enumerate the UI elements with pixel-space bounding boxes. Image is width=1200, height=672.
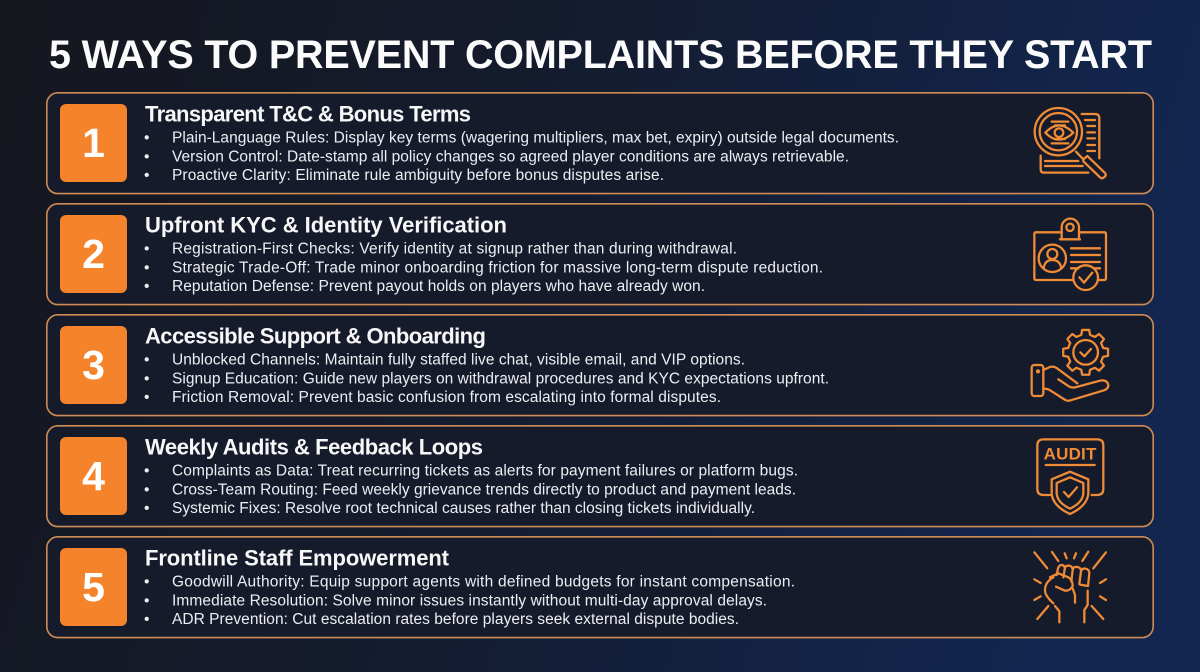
bullet list 3: •	[144, 352, 149, 368]
bullet list 1: Version Control: Date-stamp all policy changes so agreed player conditions are always retrievable.	[172, 148, 849, 166]
bullet list 5: Goodwill Authority: Equip support agents with defined budgets for instant compensation.	[172, 574, 795, 590]
panel: upfront KYC	[47, 204, 1153, 305]
heading 1: Transparent T&C & Bonus Terms	[145, 102, 471, 126]
number badge 5	[60, 548, 127, 626]
number badge 3: 3	[82, 342, 105, 388]
heading 3: Accessible Support & Onboarding	[145, 324, 486, 348]
bullet list 5: •	[144, 574, 149, 590]
bullet list 3: Friction Removal: Prevent basic confusion from escalating into formal disputes.	[172, 389, 721, 406]
bullet list 2	[144, 240, 823, 295]
bullet list 4: •	[144, 500, 149, 517]
bullet list 4: •	[144, 482, 149, 498]
bullet list 5: •	[144, 611, 149, 628]
bullet list 5: Immediate Resolution: Solve minor issues instantly without multi-day approval delays.	[172, 592, 767, 610]
bullet list 1	[144, 130, 899, 184]
bullet list 2: Strategic Trade-Off: Trade minor onboarding friction for massive long-term dispute reduction.	[172, 260, 823, 276]
number badge 1	[60, 104, 127, 182]
bullet list 1: •	[144, 167, 149, 184]
heading 4: Weekly Audits & Feedback Loops	[145, 434, 483, 460]
number badge 1: 1	[82, 120, 105, 166]
bullet list 3: Unblocked Channels: Maintain fully staffed live chat, visible email, and VIP options.	[172, 352, 745, 368]
bullet list 5: ADR Prevention: Cut escalation rates before players seek external dispute bodies.	[172, 611, 739, 628]
bullet list 2: •	[144, 240, 149, 258]
bullet list 1: Plain-Language Rules: Display key terms (wagering multipliers, max bet, expiry) outside legal documents.	[172, 130, 899, 146]
bullet list 3: •	[144, 389, 149, 406]
number badge 3	[60, 326, 127, 404]
number badge 2: 2	[82, 231, 105, 277]
bullet list 3	[144, 352, 829, 406]
bullet list 4: Systemic Fixes: Resolve root technical causes rather than closing tickets individually.	[172, 500, 755, 517]
bullet list 1: •	[144, 130, 149, 146]
bullet list 5: •	[144, 592, 149, 610]
number badge 2	[60, 215, 127, 293]
bullet list 1: •	[144, 148, 149, 166]
panel: transparent terms	[47, 93, 1153, 194]
icon: audit shield	[1037, 439, 1103, 514]
bullet list 5	[144, 574, 795, 628]
bullet list 4	[144, 462, 798, 517]
bullet list 2: •	[144, 260, 149, 276]
bullet list 4: Cross-Team Routing: Feed weekly grievance trends directly to product and payment leads.	[172, 482, 796, 498]
icon: audit shield: AUDIT	[1044, 444, 1097, 463]
bullet list 3: •	[144, 370, 149, 388]
number badge 4: 4	[82, 453, 105, 499]
number badge 5: 5	[82, 564, 105, 610]
panel: frontline staff	[47, 537, 1153, 638]
number badge 4	[60, 437, 127, 515]
bullet list 2: •	[144, 278, 149, 295]
bullet list 2: Registration-First Checks: Verify identity at signup rather than during withdrawal.	[172, 240, 737, 258]
bullet list 4: Complaints as Data: Treat recurring tickets as alerts for payment failures or platform bugs.	[172, 462, 798, 480]
heading 5: Frontline Staff Empowerment	[145, 546, 450, 570]
title: 5 WAYS TO PREVENT COMPLAINTS BEFORE THEY START	[49, 33, 1152, 77]
bullet list 3: Signup Education: Guide new players on withdrawal procedures and KYC expectations upfront.	[172, 370, 829, 388]
bullet list 4: •	[144, 462, 149, 480]
heading 2: Upfront KYC & Identity Verification	[145, 212, 507, 238]
bullet list 2: Reputation Defense: Prevent payout holds on players who have already won.	[172, 278, 705, 295]
icon: magnifier over document	[1035, 108, 1106, 178]
icon: hand holding gear	[1032, 330, 1108, 401]
icon: ID badge with check	[1034, 219, 1106, 290]
panel: weekly audits	[47, 426, 1153, 527]
icon: raised fist with rays	[1034, 552, 1106, 622]
panel: accessible support	[47, 315, 1153, 416]
bullet list 1: Proactive Clarity: Eliminate rule ambiguity before bonus disputes arise.	[172, 167, 664, 184]
